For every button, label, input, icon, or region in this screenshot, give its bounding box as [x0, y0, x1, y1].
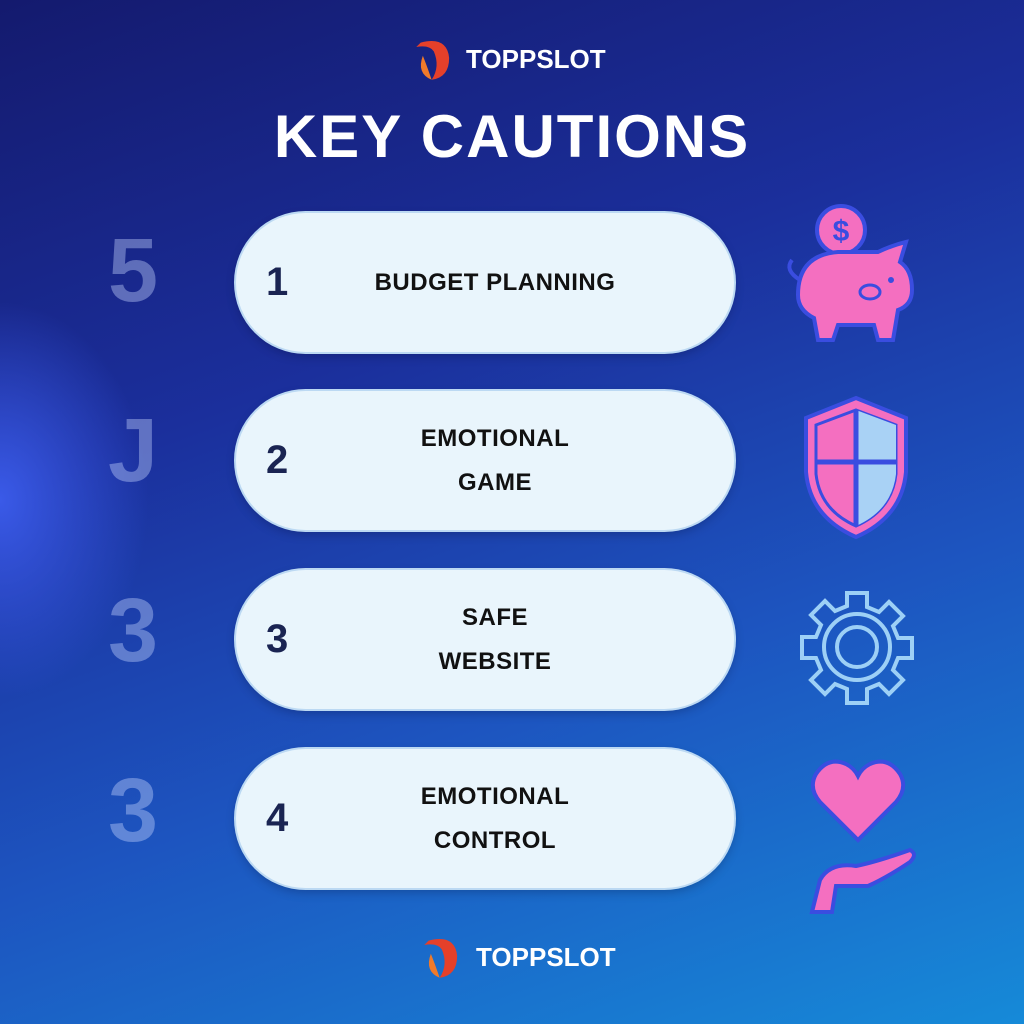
card 2: 2: [266, 438, 288, 482]
card 4: CONTROL: [434, 826, 556, 854]
card 3: 3: [266, 617, 288, 661]
ghost numbers: 5: [108, 221, 158, 321]
ghost numbers: 3: [108, 761, 158, 861]
card 4: EMOTIONAL: [421, 782, 569, 810]
title: KEY CAUTIONS: [274, 103, 750, 170]
card 1: [236, 213, 734, 352]
logo bottom: TOPPSLOT: [476, 942, 616, 972]
card 2: [236, 391, 734, 530]
card 3: SAFE: [462, 604, 528, 630]
ghost numbers: J: [108, 401, 158, 501]
card 4: 4: [266, 796, 288, 840]
logo bottom: [424, 939, 616, 978]
card 1: 1: [266, 260, 288, 304]
icon: heart in hand: [810, 760, 916, 914]
ghost numbers: [108, 221, 158, 861]
card 2: EMOTIONAL: [421, 424, 569, 452]
icon: gear: [800, 591, 914, 705]
card 1: BUDGET PLANNING: [375, 268, 615, 296]
card 3: [236, 570, 734, 709]
logo top: [416, 41, 606, 80]
icon: shield: [804, 396, 908, 539]
icon: piggy bank: $: [833, 215, 850, 248]
logo top: TOPPSLOT: [466, 44, 606, 74]
ghost numbers: 3: [108, 581, 158, 681]
icon: piggy bank: [787, 204, 914, 342]
card 4: [236, 749, 734, 888]
card 3: WEBSITE: [439, 648, 551, 674]
card 2: GAME: [458, 468, 532, 496]
